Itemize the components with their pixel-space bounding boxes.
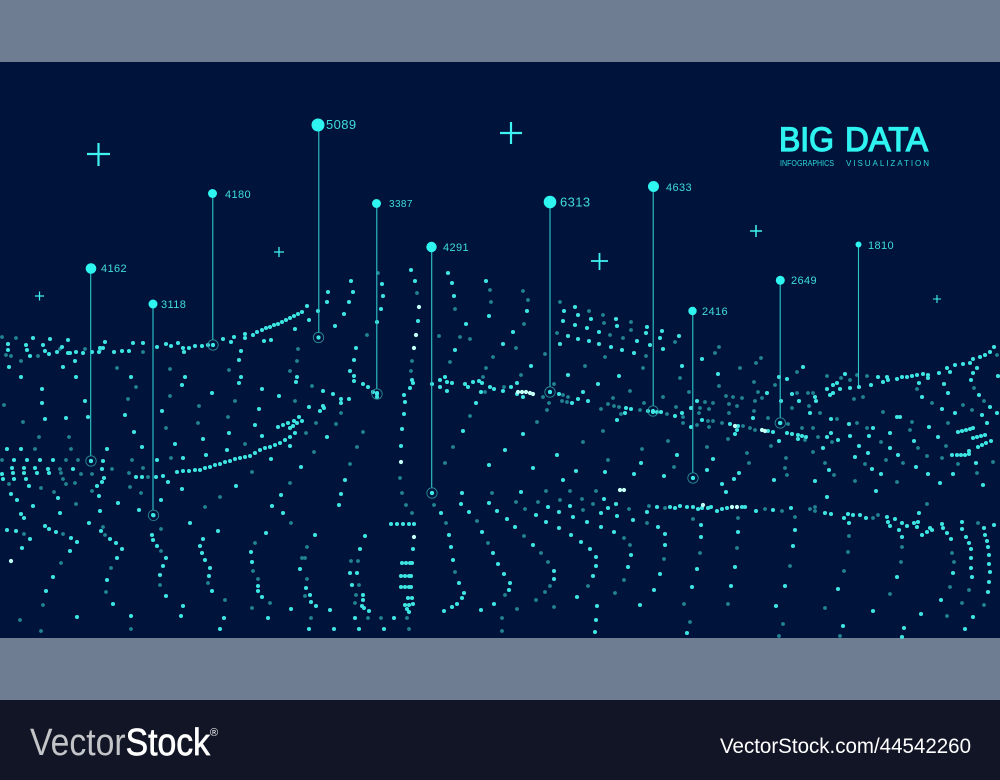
pin 5089: [312, 117, 357, 343]
registered mark: ®: [210, 727, 218, 739]
pin 3387: 3387: [389, 199, 413, 210]
pin 6313: 6313: [560, 194, 591, 210]
pin 4162: [86, 263, 127, 466]
title word DATA: DATA: [845, 121, 928, 159]
dot wave: white-hot particles: [11, 307, 765, 561]
pin 4291: [426, 242, 469, 498]
plus marker: [933, 295, 941, 303]
plus marker: [35, 292, 44, 300]
pin 4162: 4162: [101, 263, 127, 275]
pin 4291: 4291: [443, 242, 469, 254]
dot wave: bright particles: [2, 270, 998, 637]
pin 4180: [208, 189, 251, 350]
pin 3387: [372, 199, 413, 399]
plus marker: [591, 253, 608, 270]
footer logo: VectorStock: [30, 722, 211, 764]
pin 4180: 4180: [225, 189, 251, 201]
subtitle visualization: VISUALIZATION: [846, 159, 929, 168]
title word BIG: BIG: [779, 121, 834, 159]
pin 4633: [648, 181, 692, 416]
plus markers: [35, 122, 941, 303]
plus marker: [500, 122, 522, 144]
pin 2649: [775, 275, 817, 428]
pin 6313: [544, 194, 591, 397]
footer image id: VectorStock.com/44542260: [720, 735, 971, 758]
subtitle infographics: INFOGRAPHICS: [780, 159, 834, 168]
pin 3118: [148, 299, 186, 520]
plus marker: [750, 225, 762, 237]
title: big data: [779, 121, 929, 168]
pin 4633: 4633: [666, 182, 692, 194]
pin 2416: 2416: [702, 306, 728, 318]
data pins: [86, 117, 894, 520]
pin 5089: 5089: [326, 117, 357, 132]
panel: navy visualization background: [0, 62, 1000, 638]
dot wave: dim particles: [2, 273, 997, 636]
plus marker: [274, 247, 284, 257]
pin 1810: 1810: [868, 240, 894, 252]
pin 3118: 3118: [161, 299, 186, 311]
footer bar: [0, 700, 1000, 780]
pin 1810: [856, 240, 894, 385]
pin 2416: [688, 306, 728, 483]
pin 2649: 2649: [791, 275, 817, 287]
plus marker: [87, 143, 110, 166]
